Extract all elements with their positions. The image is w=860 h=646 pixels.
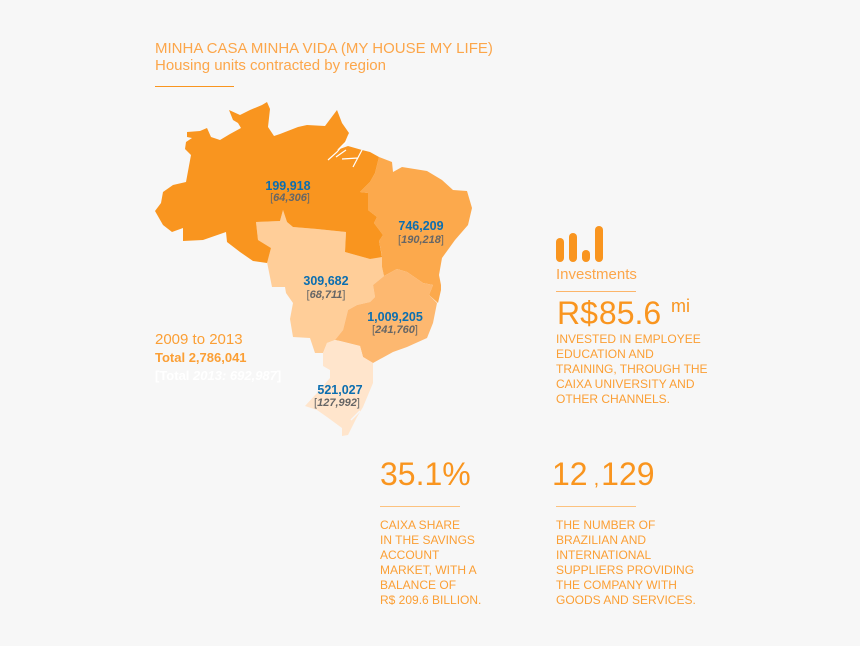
totals <box>155 331 281 383</box>
share text: CAIXA SHARE <box>380 518 460 532</box>
title: Housing units contracted by region <box>155 57 386 74</box>
investments text: INVESTED IN EMPLOYEE <box>556 332 701 346</box>
label: north: 199,918 <box>265 179 311 193</box>
icon: bar chart <box>556 226 603 262</box>
suppliers text: THE COMPANY WITH <box>556 578 677 592</box>
label: south: 521,027 <box>317 383 363 397</box>
region: northeast <box>360 157 472 303</box>
stat: suppliers: 12 ,129 <box>552 456 655 492</box>
title <box>155 40 493 74</box>
investments text <box>556 332 708 406</box>
share text: MARKET, WITH A <box>380 563 477 577</box>
suppliers text: SUPPLIERS PROVIDING <box>556 563 694 577</box>
lagoon <box>351 411 360 420</box>
share text: R$ 209.6 BILLION. <box>380 593 481 607</box>
suppliers text: INTERNATIONAL <box>556 548 651 562</box>
share text: BALANCE OF <box>380 578 456 592</box>
investments figure: mi <box>671 296 690 316</box>
text: [64,306] <box>270 192 310 204</box>
river delta <box>328 141 362 167</box>
title: MINHA CASA MINHA VIDA (MY HOUSE MY LIFE) <box>155 40 493 57</box>
label: southeast: 1,009,205 <box>367 310 423 324</box>
investments figure: R$85.6 <box>557 295 661 331</box>
suppliers text: GOODS AND SERVICES. <box>556 593 696 607</box>
suppliers text <box>556 518 696 607</box>
investments text: TRAINING, THROUGH THE <box>556 362 708 376</box>
region: north <box>155 102 383 263</box>
region: south <box>305 340 373 436</box>
label: central-west: 309,682 <box>303 274 349 288</box>
share text <box>380 518 481 607</box>
totals: Total 2,786,041 <box>155 350 247 365</box>
text: [241,760] <box>372 324 418 336</box>
share text: IN THE SAVINGS <box>380 533 475 547</box>
text: [190,218] <box>398 234 444 246</box>
investments text: OTHER CHANNELS. <box>556 392 670 406</box>
region: southeast <box>335 269 437 363</box>
totals: 2009 to 2013 <box>155 331 243 348</box>
investments text: CAIXA UNIVERSITY AND <box>556 377 694 391</box>
suppliers text: BRAZILIAN AND <box>556 533 646 547</box>
text: [68,711] <box>307 289 345 301</box>
investments text: EDUCATION AND <box>556 347 654 361</box>
region: central-west <box>256 210 384 353</box>
share text: ACCOUNT <box>380 548 439 562</box>
investments heading: Investments <box>556 266 637 283</box>
text: [127,992] <box>314 397 360 409</box>
stat: share: 35.1% <box>380 456 471 492</box>
totals: [Total 2013: 692,987] <box>155 368 281 383</box>
label: northeast: 746,209 <box>398 219 444 233</box>
suppliers text: THE NUMBER OF <box>556 518 655 532</box>
